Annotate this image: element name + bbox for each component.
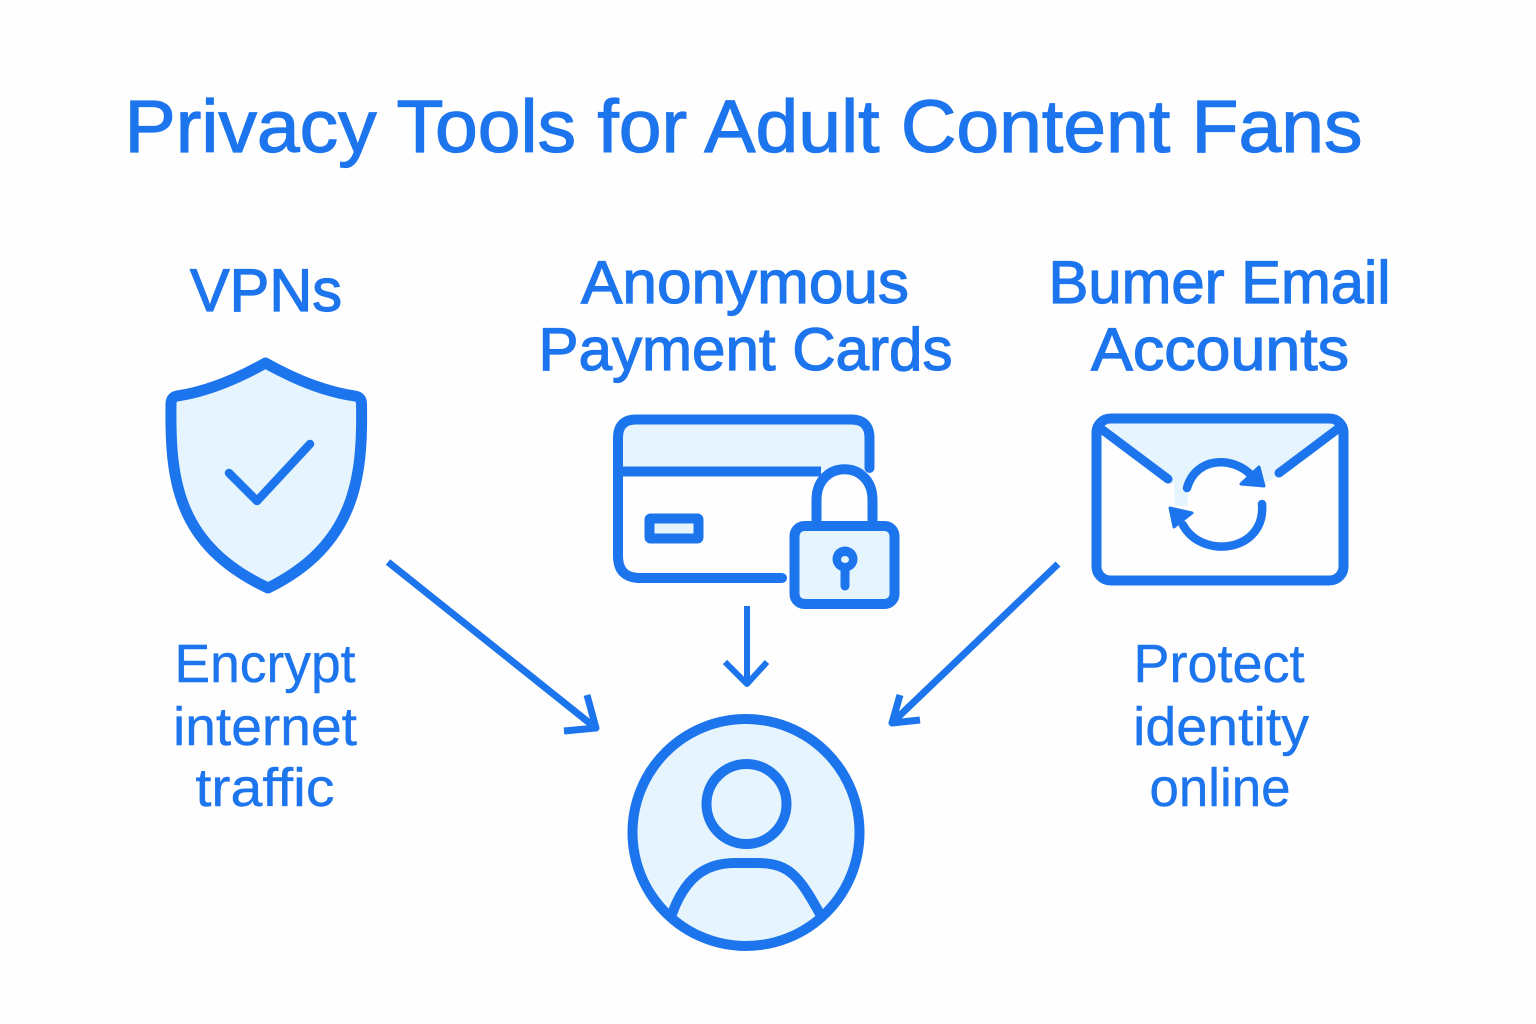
heading: VPNs: VPNs	[190, 257, 342, 324]
text: Encrypt internet traffic	[173, 634, 357, 818]
text: Protect identity online: online	[1150, 758, 1290, 818]
arrow: email to user	[892, 564, 1058, 723]
text: Protect identity online: identity	[1133, 697, 1309, 757]
heading: Anonymous Payment Cards: Anonymous	[581, 249, 909, 316]
arrow: VPN to user	[388, 562, 596, 731]
text: Protect identity online	[1133, 634, 1309, 818]
heading: Anonymous Payment Cards	[538, 249, 952, 383]
heading: Anonymous Payment Cards: Payment Cards	[538, 316, 952, 383]
title: Privacy Tools for Adult Content Fans	[124, 85, 1362, 168]
heading: Burner Email Accounts	[1048, 249, 1390, 383]
icon: user	[632, 719, 860, 946]
icon: payment card with lock	[618, 420, 894, 604]
icon: shield	[171, 363, 362, 588]
text: Encrypt internet traffic: Encrypt	[174, 634, 356, 694]
text: Encrypt internet traffic: traffic	[196, 758, 334, 818]
text: Encrypt internet traffic: internet	[173, 697, 357, 757]
heading: Burner Email Accounts: Accounts	[1091, 316, 1349, 383]
arrow: card to user	[725, 606, 767, 684]
heading: Burner Email Accounts: Bumer Email	[1048, 249, 1390, 316]
icon: envelope with refresh arrows	[1096, 418, 1344, 580]
text: Protect identity online: Protect	[1134, 634, 1304, 694]
